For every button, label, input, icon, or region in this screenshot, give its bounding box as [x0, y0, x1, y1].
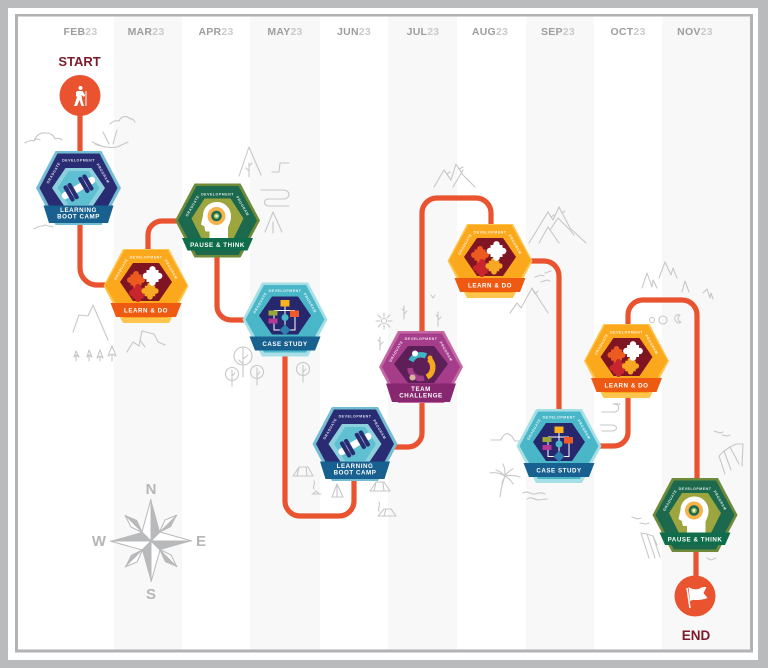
badge: pause and think nov: DEVELOPMENT — [679, 487, 712, 491]
badge: pause and think nov: PROGRAM — [713, 490, 727, 511]
badge: learn and do aug: GRADUATE — [457, 233, 473, 256]
badge: team challenge jul: CHALLENGE — [399, 392, 443, 400]
badge: learning boot camp feb: PROGRAM — [96, 163, 110, 184]
badge: learn and do oct — [584, 324, 669, 398]
badge: learn and do oct: DEVELOPMENT — [610, 330, 643, 334]
compass: E — [196, 533, 206, 550]
badge: learning boot camp jun: BOOT CAMP — [334, 470, 376, 476]
badge: case study sep: DEVELOPMENT — [543, 416, 576, 420]
icon: end flag — [674, 576, 716, 616]
month labels: AUG23 — [472, 26, 508, 38]
compass: S — [146, 586, 156, 603]
badge: learn and do mar: GRADUATE — [113, 258, 129, 281]
badge: pause and think nov: GRADUATE — [662, 489, 678, 512]
compass: N — [146, 481, 156, 498]
badge: learning boot camp jun: PROGRAM — [372, 419, 387, 440]
badge: pause and think apr: PAUSE & THINK — [190, 242, 245, 249]
month labels: MAY23 — [267, 26, 303, 38]
end label: END — [682, 628, 710, 643]
badge: learn and do mar: PROGRAM — [164, 259, 178, 280]
badge: case study sep — [516, 409, 602, 483]
badge: case study may — [242, 282, 328, 356]
badge: learn and do mar: LEARN & DO — [124, 308, 168, 314]
badge: case study sep: PROGRAM — [577, 419, 591, 440]
badge: case study may: CASE STUDY — [262, 341, 308, 348]
badge: pause and think apr: PROGRAM — [235, 195, 250, 217]
month labels: OCT23 — [610, 26, 646, 38]
badge: learning boot camp jun — [312, 407, 398, 481]
badge: pause and think nov — [652, 478, 738, 552]
month labels: FEB23 — [64, 26, 97, 38]
badge: learning boot camp jun: GRADUATE — [322, 417, 338, 440]
icon: start hiker — [60, 75, 100, 116]
journey path — [80, 115, 697, 580]
badge: learning boot camp feb: LEARNING — [60, 207, 97, 214]
badge: case study sep: CASE STUDY — [536, 468, 582, 474]
start label: START — [58, 54, 101, 69]
month labels: JUN23 — [337, 26, 371, 38]
badge: case study may: DEVELOPMENT — [269, 289, 302, 293]
badge: learning boot camp jun: LEARNING — [337, 463, 373, 470]
badge: learn and do aug — [448, 224, 532, 298]
badge: learn and do mar — [104, 249, 188, 323]
badge: learn and do oct: PROGRAM — [644, 334, 659, 355]
badge: learning boot camp jun: DEVELOPMENT — [339, 414, 372, 418]
badge: learning boot camp feb: DEVELOPMENT — [62, 158, 95, 162]
scenery doodles — [25, 117, 743, 560]
badge: learning boot camp feb — [36, 151, 121, 225]
month labels: MAR23 — [128, 26, 164, 38]
badge: pause and think nov: PAUSE & THINK — [668, 536, 722, 544]
badge: learning boot camp feb: GRADUATE — [46, 161, 61, 184]
month labels: APR23 — [198, 26, 234, 38]
badge: learn and do oct: GRADUATE — [594, 333, 609, 356]
compass: W — [92, 533, 107, 550]
badge: team challenge jul: TEAM — [411, 386, 431, 393]
badge: case study may: PROGRAM — [303, 292, 317, 314]
badge: pause and think apr: DEVELOPMENT — [201, 192, 234, 196]
month labels: JUL23 — [407, 26, 439, 38]
month labels: SEP23 — [541, 26, 575, 38]
month labels: NOV23 — [677, 26, 713, 38]
badge: team challenge jul: PROGRAM — [439, 341, 453, 362]
badge: learn and do mar: DEVELOPMENT — [130, 256, 163, 260]
badge: learning boot camp feb: BOOT CAMP — [57, 214, 100, 220]
badge: pause and think apr: GRADUATE — [185, 194, 200, 217]
badge: learn and do aug: DEVELOPMENT — [474, 230, 507, 234]
badge: case study sep: GRADUATE — [526, 418, 542, 441]
badge: team challenge jul — [379, 331, 463, 403]
badge: learn and do aug: PROGRAM — [508, 234, 522, 255]
badge: team challenge jul: GRADUATE — [388, 340, 404, 363]
month labels — [64, 26, 713, 38]
badge: learn and do oct: LEARN & DO — [604, 382, 648, 390]
badge: case study may: GRADUATE — [252, 291, 268, 314]
compass — [92, 481, 206, 603]
badge: learn and do aug: LEARN & DO — [468, 282, 512, 290]
badge: team challenge jul: DEVELOPMENT — [405, 337, 438, 341]
badge: pause and think apr — [175, 184, 260, 258]
